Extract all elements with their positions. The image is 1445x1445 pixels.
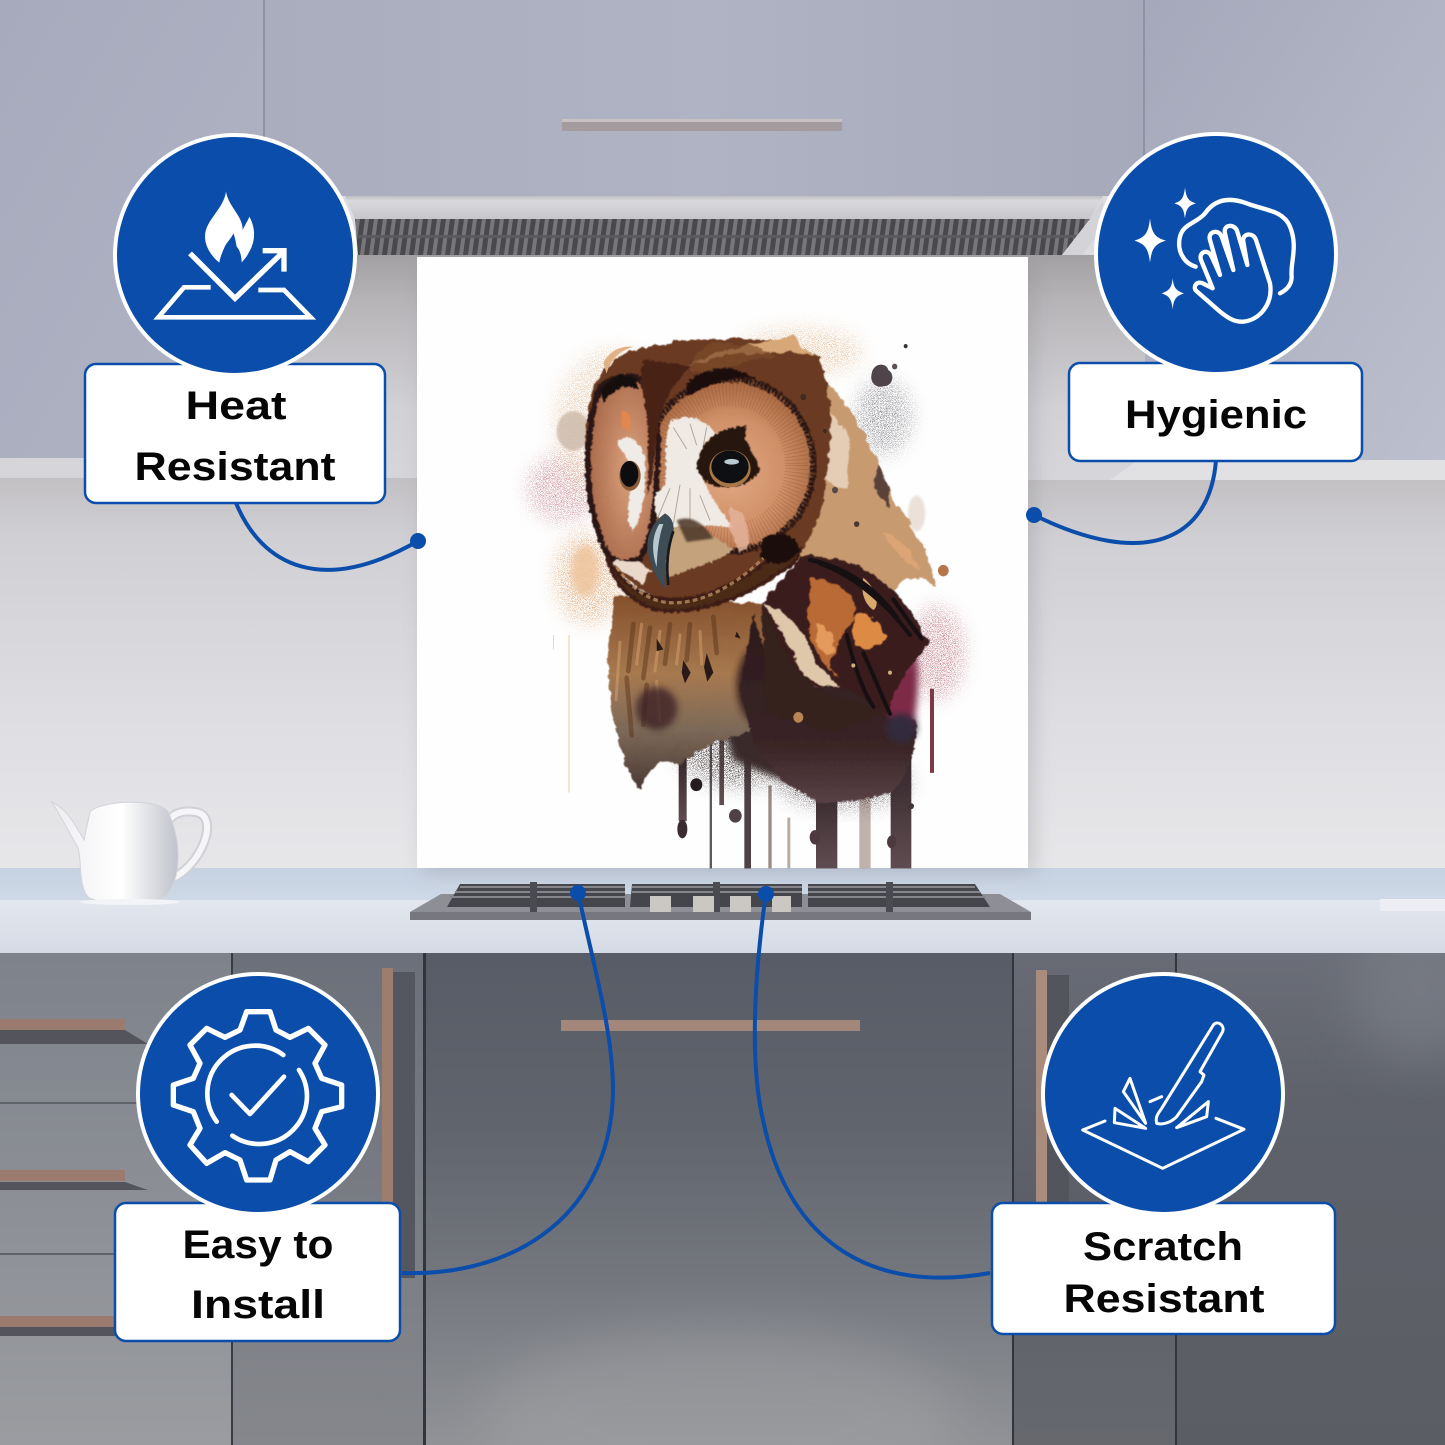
- heading: easy to install: Install: [191, 1283, 325, 1327]
- badge: heat resistant: [115, 135, 355, 375]
- icon: knife scratching surface: [1083, 1023, 1244, 1168]
- connector: scratch resistant to panel: [755, 886, 990, 1278]
- feature: easy to install: [115, 974, 400, 1341]
- forehead spine: [640, 359, 690, 495]
- range hood: [345, 196, 1103, 219]
- cabinet lips: [0, 458, 262, 478]
- paint splatter cloud: [527, 327, 965, 793]
- wing feathers: [762, 556, 930, 714]
- feature: heat resistant: [85, 135, 385, 503]
- feature: hygienic: [1069, 134, 1362, 461]
- body and chest feathers: [608, 596, 793, 791]
- feature: scratch resistant: [992, 974, 1335, 1334]
- facial disk left: [588, 377, 658, 563]
- facial disk right: [647, 379, 813, 551]
- label box: easy to install: [115, 1203, 400, 1341]
- upper cabinets: [0, 0, 264, 458]
- owl painting: [527, 327, 965, 868]
- warm flecks: [793, 394, 892, 723]
- label box: scratch resistant: [992, 1203, 1335, 1334]
- feathers under beak: [667, 526, 733, 578]
- label box: hygienic: [1069, 363, 1362, 461]
- label box: heat resistant: [85, 364, 385, 503]
- dark lower mass: [740, 614, 917, 803]
- heading: hygienic: Hygienic: [1125, 393, 1307, 437]
- head base: [586, 338, 830, 606]
- beak: [647, 513, 674, 588]
- top cabinet handle: [562, 119, 842, 131]
- cooktop: [410, 894, 1031, 920]
- wall: [0, 255, 1445, 870]
- left eye: [619, 461, 641, 491]
- drawer and door handles: [0, 1030, 148, 1044]
- heading: heat resistant: Heat: [186, 384, 286, 428]
- white brow feathers: [655, 417, 733, 531]
- countertop: [0, 868, 1445, 902]
- badge: hygienic: [1096, 134, 1336, 374]
- heading: heat resistant: Resistant: [134, 445, 336, 489]
- splashback panel with owl artwork: [417, 257, 1034, 873]
- connector: hygienic to panel: [1026, 460, 1216, 543]
- icon: flame over surface: [158, 192, 311, 317]
- drips and spots: [677, 344, 949, 868]
- heading: scratch resistant: Scratch: [1083, 1225, 1243, 1269]
- icon: wiping hand with sparkles: [1134, 188, 1294, 322]
- connector: easy to install to panel: [402, 885, 613, 1273]
- heading: scratch resistant: Resistant: [1064, 1277, 1264, 1321]
- heading: easy to install: Easy to: [182, 1223, 334, 1267]
- connector: heat resistant to panel: [236, 503, 426, 570]
- teapot: [168, 812, 207, 880]
- collar band: [607, 549, 800, 611]
- lower cabinets: [0, 953, 231, 1445]
- badge: easy to install: [138, 974, 378, 1214]
- right eye: [697, 426, 760, 487]
- back and shoulder: [753, 358, 935, 592]
- badge: scratch resistant: [1043, 974, 1283, 1214]
- speckled dark under chest: [677, 714, 803, 785]
- icon: gear with check: [173, 1012, 342, 1180]
